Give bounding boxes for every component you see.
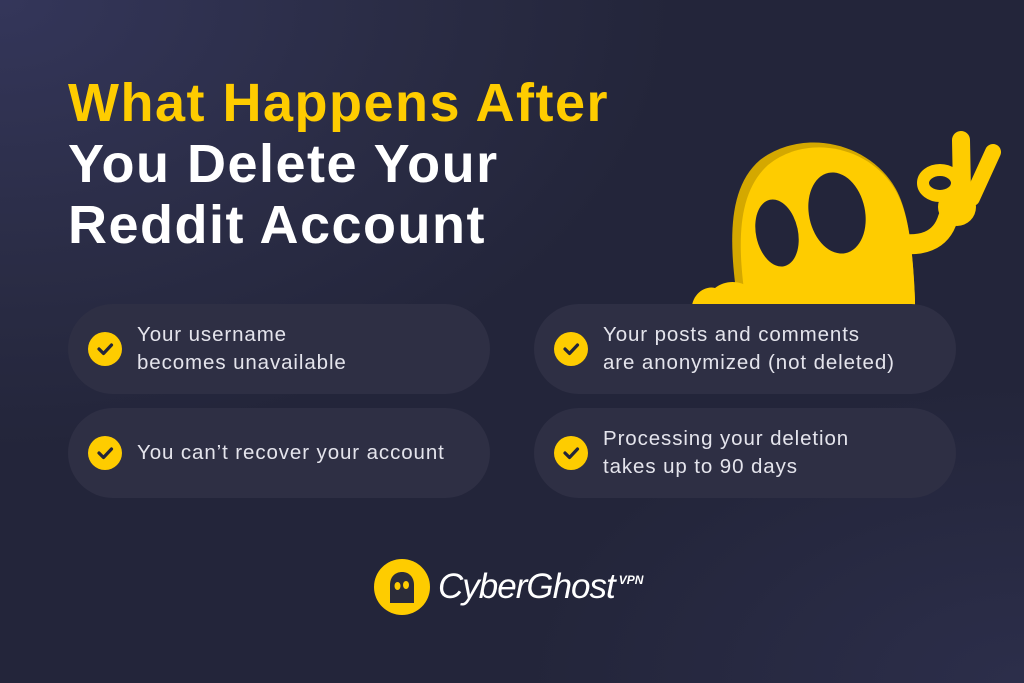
text: Processing your deletion — [603, 427, 849, 450]
card: anonymized — [534, 304, 956, 394]
text: brand: CyberGhost VPN — [438, 567, 643, 606]
text — [603, 323, 895, 374]
text: You can’t recover your account — [137, 441, 445, 464]
title: You Delete Your — [68, 134, 499, 194]
title — [68, 73, 609, 255]
text — [603, 427, 849, 478]
icon: check — [88, 436, 122, 470]
text: Your posts and comments — [603, 323, 860, 346]
card: recover — [68, 408, 490, 498]
icon: logo ghost — [374, 559, 430, 615]
text: takes up to 90 days — [603, 455, 798, 478]
icon: ghost mascot — [692, 131, 1001, 304]
text — [137, 323, 347, 374]
card: 90 days — [534, 408, 956, 498]
logo: CyberGhost VPN — [374, 559, 644, 615]
icon: check — [554, 332, 588, 366]
title: What Happens After — [68, 73, 609, 133]
text: becomes unavailable — [137, 351, 347, 374]
icon: check — [554, 436, 588, 470]
icon: check — [88, 332, 122, 366]
text: are anonymized (not deleted) — [603, 351, 895, 374]
card: username — [68, 304, 490, 394]
text: Your username — [137, 323, 287, 346]
title: Reddit Account — [68, 195, 486, 255]
